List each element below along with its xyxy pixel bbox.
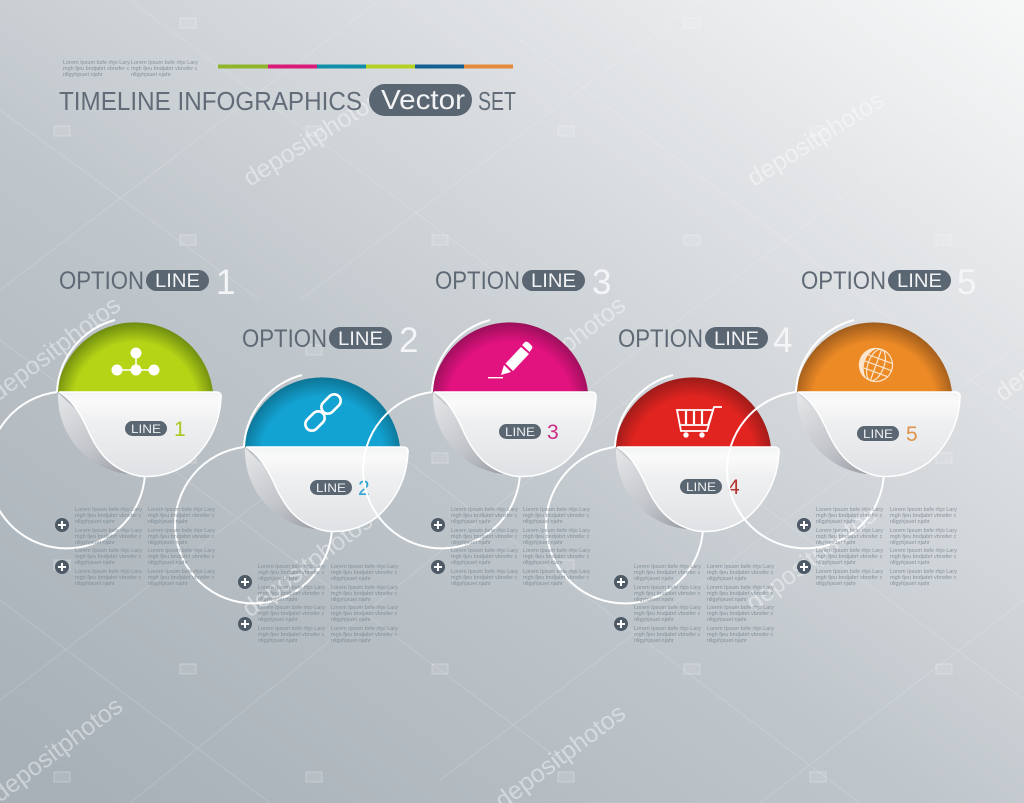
- text column 5b: nllgyhjsuet njahr: [890, 540, 930, 546]
- text column 5b: mgh fjeu bndjabrt vbnsfer c: [890, 534, 956, 540]
- text column 3a: nllgyhjsuet njahr: [451, 540, 491, 546]
- text column 4a: Lorem Ipsum bsfe rhjo Lary: [634, 584, 701, 590]
- text column 3a: Lorem Ipsum bsfe rhjo Lary: [451, 507, 518, 513]
- text column 5b: nllgyhjsuet njahr: [890, 580, 930, 586]
- text column 1a: mgh fjeu bndjabrt vbnsfer c: [75, 554, 141, 560]
- text column 4b: nllgyhjsuet njahr: [707, 617, 747, 623]
- text column 2b: [331, 564, 398, 644]
- title: TIMELINE INFOGRAPHICS: [59, 86, 362, 116]
- text column 3a: nllgyhjsuet njahr: [451, 560, 491, 566]
- text column 2a: Lorem Ipsum bsfe rhjo Lary: [258, 564, 325, 570]
- sticker 2: 2: [358, 477, 370, 500]
- text column 5a: nllgyhjsuet njahr: [816, 560, 856, 566]
- text column 5a: mgh fjeu bndjabrt vbnsfer c: [816, 554, 882, 560]
- option 1 heading: LINE: [155, 271, 200, 292]
- text column 2b: mgh fjeu bndjabrt vbnsfer c: [331, 632, 397, 638]
- text column 2b: mgh fjeu bndjabrt vbnsfer c: [331, 611, 397, 617]
- text column 5a: nllgyhjsuet njahr: [816, 580, 856, 586]
- text column 2b: Lorem Ipsum bsfe rhjo Lary: [331, 564, 398, 570]
- text column 1b: nllgyhjsuet njahr: [148, 519, 188, 525]
- text column 3a: [451, 507, 518, 586]
- option 2 heading: LINE: [338, 329, 383, 350]
- text column 2a: Lorem Ipsum bsfe rhjo Lary: [258, 584, 325, 590]
- text column 1a: Lorem Ipsum bsfe rhjo Lary: [75, 528, 142, 534]
- text column 2b: nllgyhjsuet njahr: [331, 576, 371, 582]
- icon: chain link: [303, 392, 343, 433]
- watermark: depositphotos: [741, 501, 882, 617]
- text column 4b: Lorem Ipsum bsfe rhjo Lary: [707, 605, 774, 611]
- text column 1a: [75, 507, 142, 586]
- option 1 heading: OPTION: [59, 267, 144, 295]
- watermark: depositphotos: [238, 86, 385, 192]
- text column 1b: Lorem Ipsum bsfe rhjo Lary: [148, 548, 215, 554]
- text column 4b: mgh fjeu bndjabrt vbnsfer c: [707, 611, 773, 617]
- option 1 heading: 1: [216, 263, 235, 302]
- text column 2b: nllgyhjsuet njahr: [331, 596, 371, 602]
- icon: pencil: [488, 342, 532, 378]
- text column 4a: mgh fjeu bndjabrt vbnsfer c: [634, 632, 700, 638]
- title: [59, 84, 516, 116]
- text column 4a: nllgyhjsuet njahr: [634, 596, 674, 602]
- text column 3a: Lorem Ipsum bsfe rhjo Lary: [451, 548, 518, 554]
- sticker 1: 1: [174, 418, 186, 441]
- option 5 heading: 5: [957, 263, 976, 302]
- sticker 5: 5: [906, 423, 918, 446]
- option 5 heading: OPTION: [801, 267, 886, 295]
- sticker 3: 3: [547, 421, 559, 444]
- text column 5b: nllgyhjsuet njahr: [890, 519, 930, 525]
- text column 3b: mgh fjeu bndjabrt vbnsfer c: [523, 534, 589, 540]
- text column 3a: mgh fjeu bndjabrt vbnsfer c: [451, 554, 517, 560]
- sticker 2: LINE: [316, 481, 346, 495]
- text column 4b: Lorem Ipsum bsfe rhjo Lary: [707, 564, 774, 570]
- text column 1b: Lorem Ipsum bsfe rhjo Lary: [148, 528, 215, 534]
- text column 2a: Lorem Ipsum bsfe rhjo Lary: [258, 605, 325, 611]
- header text left: mgh fjeu bndjabrt vbnsfer c: [63, 66, 129, 72]
- text column 5b: nllgyhjsuet njahr: [890, 560, 930, 566]
- text column 5b: mgh fjeu bndjabrt vbnsfer c: [890, 574, 956, 580]
- text column 2a: Lorem Ipsum bsfe rhjo Lary: [258, 626, 325, 632]
- text column 1a: Lorem Ipsum bsfe rhjo Lary: [75, 507, 142, 513]
- sticker 4: [546, 375, 779, 603]
- text column 5b: Lorem Ipsum bsfe rhjo Lary: [890, 568, 957, 574]
- option 3 heading: LINE: [531, 271, 576, 292]
- text column 1a: nllgyhjsuet njahr: [75, 560, 115, 566]
- text column 4b: mgh fjeu bndjabrt vbnsfer c: [707, 590, 773, 596]
- text column 2a: mgh fjeu bndjabrt vbnsfer c: [258, 611, 324, 617]
- text column 4b: [707, 564, 774, 644]
- text column 5b: Lorem Ipsum bsfe rhjo Lary: [890, 528, 957, 534]
- text column 3a: mgh fjeu bndjabrt vbnsfer c: [451, 534, 517, 540]
- text column 4a: Lorem Ipsum bsfe rhjo Lary: [634, 626, 701, 632]
- header text right: mgh fjeu bndjabrt vbnsfer c: [131, 66, 197, 72]
- text column 4a: mgh fjeu bndjabrt vbnsfer c: [634, 590, 700, 596]
- text column 4b: nllgyhjsuet njahr: [707, 638, 747, 644]
- text column 3b: nllgyhjsuet njahr: [523, 560, 563, 566]
- plus icons: [55, 518, 811, 631]
- text column 5a: mgh fjeu bndjabrt vbnsfer c: [816, 534, 882, 540]
- option 4 heading: OPTION: [618, 325, 703, 353]
- text column 5a: mgh fjeu bndjabrt vbnsfer c: [816, 513, 882, 519]
- icon: shopping cart: [677, 407, 722, 437]
- text column 1a: Lorem Ipsum bsfe rhjo Lary: [75, 568, 142, 574]
- sticker 5: LINE: [863, 427, 893, 441]
- text column 5b: Lorem Ipsum bsfe rhjo Lary: [890, 507, 957, 513]
- text column 3b: mgh fjeu bndjabrt vbnsfer c: [523, 554, 589, 560]
- text column 5a: nllgyhjsuet njahr: [816, 540, 856, 546]
- option 1 heading: [59, 263, 235, 302]
- header text right: [131, 60, 198, 78]
- icon: globe: [855, 344, 897, 386]
- text column 5a: mgh fjeu bndjabrt vbnsfer c: [816, 574, 882, 580]
- text column 1b: mgh fjeu bndjabrt vbnsfer c: [148, 574, 214, 580]
- option 2 heading: 2: [399, 321, 418, 360]
- text column 3b: nllgyhjsuet njahr: [523, 519, 563, 525]
- text column 4a: mgh fjeu bndjabrt vbnsfer c: [634, 611, 700, 617]
- text column 1a: Lorem Ipsum bsfe rhjo Lary: [75, 548, 142, 554]
- text column 2b: Lorem Ipsum bsfe rhjo Lary: [331, 584, 398, 590]
- text column 3b: Lorem Ipsum bsfe rhjo Lary: [523, 548, 590, 554]
- text column 5a: nllgyhjsuet njahr: [816, 519, 856, 525]
- text column 4a: nllgyhjsuet njahr: [634, 617, 674, 623]
- text column 1b: nllgyhjsuet njahr: [148, 580, 188, 586]
- text column 4a: nllgyhjsuet njahr: [634, 638, 674, 644]
- watermark: depositphotos: [237, 507, 378, 623]
- text column 3b: Lorem Ipsum bsfe rhjo Lary: [523, 528, 590, 534]
- header colour bar: [218, 64, 513, 68]
- sticker 5: [727, 320, 960, 548]
- text column 2a: nllgyhjsuet njahr: [258, 617, 298, 623]
- option 5 heading: LINE: [897, 271, 942, 292]
- text column 3b: nllgyhjsuet njahr: [523, 580, 563, 586]
- text column 5a: Lorem Ipsum bsfe rhjo Lary: [816, 507, 883, 513]
- text column 1a: mgh fjeu bndjabrt vbnsfer c: [75, 513, 141, 519]
- text column 2b: Lorem Ipsum bsfe rhjo Lary: [331, 605, 398, 611]
- text column 4a: [634, 564, 701, 644]
- option 5 heading: [801, 263, 976, 302]
- option 4 heading: LINE: [714, 329, 759, 350]
- sticker 1: [0, 320, 221, 548]
- text column 1b: mgh fjeu bndjabrt vbnsfer c: [148, 513, 214, 519]
- option 3 heading: OPTION: [435, 267, 520, 295]
- text column 3a: Lorem Ipsum bsfe rhjo Lary: [451, 568, 518, 574]
- text column 5a: Lorem Ipsum bsfe rhjo Lary: [816, 528, 883, 534]
- text column 4b: nllgyhjsuet njahr: [707, 576, 747, 582]
- text column 3b: mgh fjeu bndjabrt vbnsfer c: [523, 513, 589, 519]
- text column 1b: Lorem Ipsum bsfe rhjo Lary: [148, 507, 215, 513]
- sticker 4: 4: [728, 476, 740, 499]
- header text right: Lorem Ipsum bsfe rhjo Lary: [131, 60, 198, 66]
- text column 2b: nllgyhjsuet njahr: [331, 638, 371, 644]
- text column 4b: mgh fjeu bndjabrt vbnsfer c: [707, 570, 773, 576]
- text column 4b: Lorem Ipsum bsfe rhjo Lary: [707, 584, 774, 590]
- text column 5a: [816, 507, 883, 586]
- text column 2a: mgh fjeu bndjabrt vbnsfer c: [258, 590, 324, 596]
- text column 2a: nllgyhjsuet njahr: [258, 638, 298, 644]
- text column 3a: mgh fjeu bndjabrt vbnsfer c: [451, 574, 517, 580]
- option 4 heading: 4: [773, 321, 792, 360]
- text column 2b: mgh fjeu bndjabrt vbnsfer c: [331, 590, 397, 596]
- header text left: Lorem Ipsum bsfe rhjo Lary: [63, 60, 130, 66]
- text column 1b: nllgyhjsuet njahr: [148, 540, 188, 546]
- text column 4a: mgh fjeu bndjabrt vbnsfer c: [634, 570, 700, 576]
- text column 4a: Lorem Ipsum bsfe rhjo Lary: [634, 605, 701, 611]
- text column 1a: mgh fjeu bndjabrt vbnsfer c: [75, 534, 141, 540]
- option 2 heading: OPTION: [242, 325, 327, 353]
- option 3 heading: 3: [592, 263, 611, 302]
- icon: network: [112, 348, 159, 375]
- text column 2b: nllgyhjsuet njahr: [331, 617, 371, 623]
- text column 4a: Lorem Ipsum bsfe rhjo Lary: [634, 564, 701, 570]
- text column 3a: mgh fjeu bndjabrt vbnsfer c: [451, 513, 517, 519]
- text column 2a: nllgyhjsuet njahr: [258, 596, 298, 602]
- text column 1b: mgh fjeu bndjabrt vbnsfer c: [148, 534, 214, 540]
- text column 5a: Lorem Ipsum bsfe rhjo Lary: [816, 568, 883, 574]
- text column 1a: mgh fjeu bndjabrt vbnsfer c: [75, 574, 141, 580]
- text column 5b: mgh fjeu bndjabrt vbnsfer c: [890, 554, 956, 560]
- text column 2a: mgh fjeu bndjabrt vbnsfer c: [258, 570, 324, 576]
- text column 4b: mgh fjeu bndjabrt vbnsfer c: [707, 632, 773, 638]
- text column 5b: [890, 507, 957, 586]
- text column 1a: nllgyhjsuet njahr: [75, 519, 115, 525]
- text column 5b: Lorem Ipsum bsfe rhjo Lary: [890, 548, 957, 554]
- text column 2b: Lorem Ipsum bsfe rhjo Lary: [331, 626, 398, 632]
- header text left: [63, 60, 130, 78]
- text column 1b: [148, 507, 215, 586]
- text column 2b: mgh fjeu bndjabrt vbnsfer c: [331, 570, 397, 576]
- text column 1a: nllgyhjsuet njahr: [75, 540, 115, 546]
- text column 3b: Lorem Ipsum bsfe rhjo Lary: [523, 568, 590, 574]
- text column 3a: nllgyhjsuet njahr: [451, 519, 491, 525]
- text column 1b: Lorem Ipsum bsfe rhjo Lary: [148, 568, 215, 574]
- text column 4a: nllgyhjsuet njahr: [634, 576, 674, 582]
- text column 4b: Lorem Ipsum bsfe rhjo Lary: [707, 626, 774, 632]
- text column 3a: Lorem Ipsum bsfe rhjo Lary: [451, 528, 518, 534]
- title: SET: [478, 86, 516, 116]
- sticker 2: [175, 375, 408, 603]
- option 3 heading: [435, 263, 611, 302]
- text column 2a: nllgyhjsuet njahr: [258, 576, 298, 582]
- sticker 3: [363, 320, 596, 548]
- header text left: nllgyhjsuet njahr: [63, 72, 103, 78]
- text column 1a: nllgyhjsuet njahr: [75, 580, 115, 586]
- text column 5a: Lorem Ipsum bsfe rhjo Lary: [816, 548, 883, 554]
- title: Vector: [381, 84, 465, 115]
- watermark: depositphotos: [490, 291, 631, 407]
- text column 3a: nllgyhjsuet njahr: [451, 580, 491, 586]
- text column 1b: mgh fjeu bndjabrt vbnsfer c: [148, 554, 214, 560]
- option 2 heading: [242, 321, 418, 360]
- watermark: depositphotos: [742, 86, 889, 192]
- text column 5b: mgh fjeu bndjabrt vbnsfer c: [890, 513, 956, 519]
- text column 1b: nllgyhjsuet njahr: [148, 560, 188, 566]
- text column 2a: [258, 564, 325, 644]
- text column 3b: mgh fjeu bndjabrt vbnsfer c: [523, 574, 589, 580]
- text column 3b: [523, 507, 590, 586]
- sticker 4: LINE: [686, 480, 716, 494]
- header text right: nllgyhjsuet njahr: [131, 72, 171, 78]
- text column 3b: Lorem Ipsum bsfe rhjo Lary: [523, 507, 590, 513]
- text column 4b: nllgyhjsuet njahr: [707, 596, 747, 602]
- text column 3b: nllgyhjsuet njahr: [523, 540, 563, 546]
- option 4 heading: [618, 321, 792, 360]
- text column 2a: mgh fjeu bndjabrt vbnsfer c: [258, 632, 324, 638]
- sticker 3: LINE: [505, 425, 535, 439]
- sticker 1: LINE: [131, 422, 161, 436]
